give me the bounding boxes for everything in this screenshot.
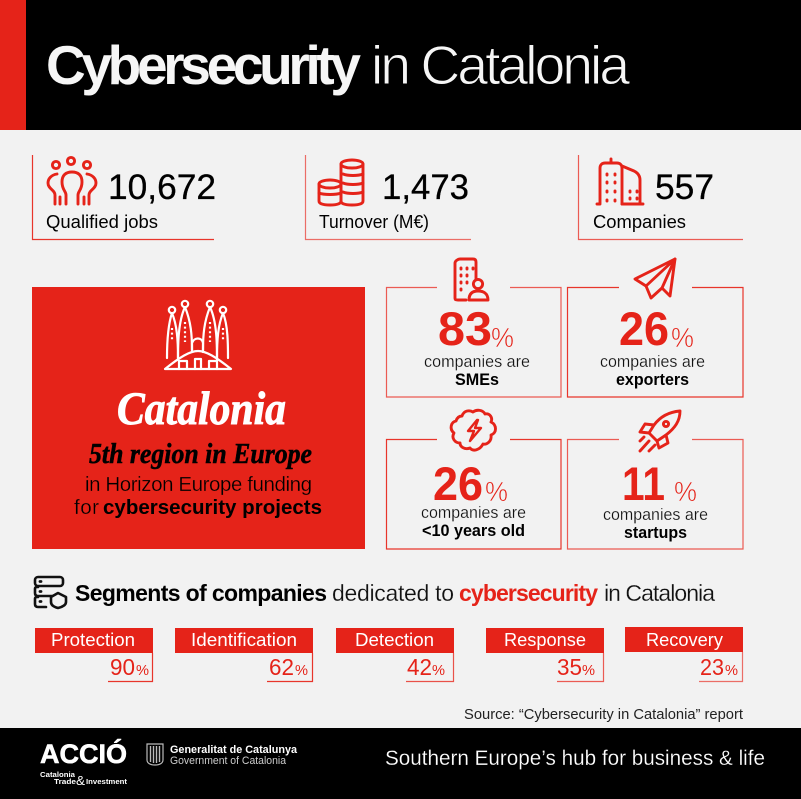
segment: Recovery: % — [725, 662, 738, 679]
card: SMEs — [386, 259, 561, 397]
icon: brain with lightning bolt — [451, 410, 496, 450]
card: under 10 years old — [386, 410, 561, 549]
segment: Identification: Identification — [191, 629, 297, 650]
card: SMEs: % — [491, 322, 514, 353]
segments heading — [35, 577, 715, 608]
card: under 10 years old: % — [485, 476, 508, 507]
stat: companies: Companies — [593, 211, 686, 232]
logo: Generalitat shield — [147, 744, 163, 765]
card: exporters: 26 — [619, 302, 669, 355]
panel: Catalonia highlight: in Horizon Europe funding — [85, 473, 312, 496]
card: SMEs: 83 — [438, 302, 492, 355]
icon: building with person — [455, 259, 488, 300]
stat: qualified jobs — [32, 155, 216, 240]
segments heading: in Catalonia — [604, 580, 715, 606]
segment: Detection — [336, 628, 454, 682]
segment: Recovery: Recovery — [646, 629, 724, 650]
segment: Response: 35 — [557, 654, 582, 680]
panel: Catalonia highlight: for — [74, 496, 99, 519]
stat: companies — [578, 155, 743, 240]
footer band — [0, 728, 801, 799]
card: startups: 11 — [622, 457, 665, 510]
card: startups: startups — [624, 524, 687, 542]
card: under 10 years old: 26 — [433, 457, 483, 510]
card: startups: % — [674, 476, 697, 507]
segment: Protection: % — [136, 662, 149, 679]
segment: Detection: Detection — [355, 629, 434, 650]
card: exporters: companies are — [600, 353, 705, 371]
segment: Identification — [175, 628, 313, 682]
logo: Generalitat text: Government of Catalonia — [170, 755, 287, 767]
logo: ACCIO — [40, 738, 128, 788]
logo: ACCIO: Catalonia — [40, 772, 75, 779]
logo: Generalitat text: Generalitat de Catalunya — [170, 744, 298, 756]
panel: Catalonia highlight: 5th region in Europe — [89, 439, 312, 470]
icon: paper plane — [635, 259, 675, 298]
stat: turnover: Turnover (M€) — [319, 211, 429, 232]
segment: Detection: 42 — [407, 654, 432, 680]
segment: Protection: 90 — [110, 654, 135, 680]
logo: ACCIO: ACCIÓ — [40, 738, 127, 769]
segment: Response: % — [582, 662, 595, 679]
segment: Identification: 62 — [269, 654, 294, 680]
logo: ACCIO: Trade — [54, 779, 76, 786]
icon: Sagrada Familia — [165, 301, 231, 369]
icon: buildings — [597, 159, 643, 204]
segments heading: cybersecurity — [459, 580, 598, 606]
segment: Protection: Protection — [51, 629, 135, 650]
segments heading: Segments of companies — [75, 580, 327, 606]
title: in Catalonia — [371, 34, 630, 96]
card: exporters: % — [671, 322, 694, 353]
slogan: Southern Europe’s hub for business & life — [385, 746, 765, 770]
logo: ACCIO: Investment — [86, 779, 128, 786]
segment: Response: Response — [504, 629, 586, 650]
segment: Response — [486, 628, 604, 682]
card: startups — [568, 411, 743, 549]
card: SMEs: companies are — [424, 353, 530, 371]
stat: qualified jobs: Qualified jobs — [46, 211, 158, 232]
segments heading: dedicated to — [332, 580, 454, 606]
segment: Identification: % — [295, 662, 308, 679]
segment: Detection: % — [432, 662, 445, 679]
icon: servers and shield — [35, 577, 66, 608]
panel: Catalonia highlight: cybersecurity projects — [103, 496, 322, 519]
logo: ACCIO: & — [76, 773, 85, 788]
segment: Recovery — [625, 627, 743, 682]
segment: Recovery: 23 — [700, 654, 724, 680]
card: under 10 years old: <10 years old — [422, 522, 525, 540]
header band — [0, 0, 801, 130]
card: startups: companies are — [603, 506, 708, 524]
card: exporters: exporters — [616, 371, 689, 389]
card: under 10 years old: companies are — [421, 504, 526, 522]
stat: companies: 557 — [655, 168, 714, 207]
stat: qualified jobs: 10,672 — [108, 168, 216, 207]
panel: Catalonia highlight — [32, 287, 365, 549]
title — [46, 34, 630, 96]
panel: Catalonia highlight: Catalonia — [117, 383, 286, 435]
logo: Generalitat text — [170, 744, 298, 767]
stat: turnover: 1,473 — [382, 168, 469, 207]
stat: turnover — [306, 155, 471, 240]
icon: people — [48, 157, 96, 204]
segment: Protection — [35, 628, 153, 682]
icon: coins — [319, 160, 363, 205]
source note: Source: “Cybersecurity in Catalonia” report — [464, 706, 744, 723]
card: SMEs: SMEs — [455, 371, 499, 389]
icon: rocket — [640, 411, 680, 451]
card: exporters — [568, 259, 743, 397]
title: Cybersecurity — [46, 34, 361, 96]
